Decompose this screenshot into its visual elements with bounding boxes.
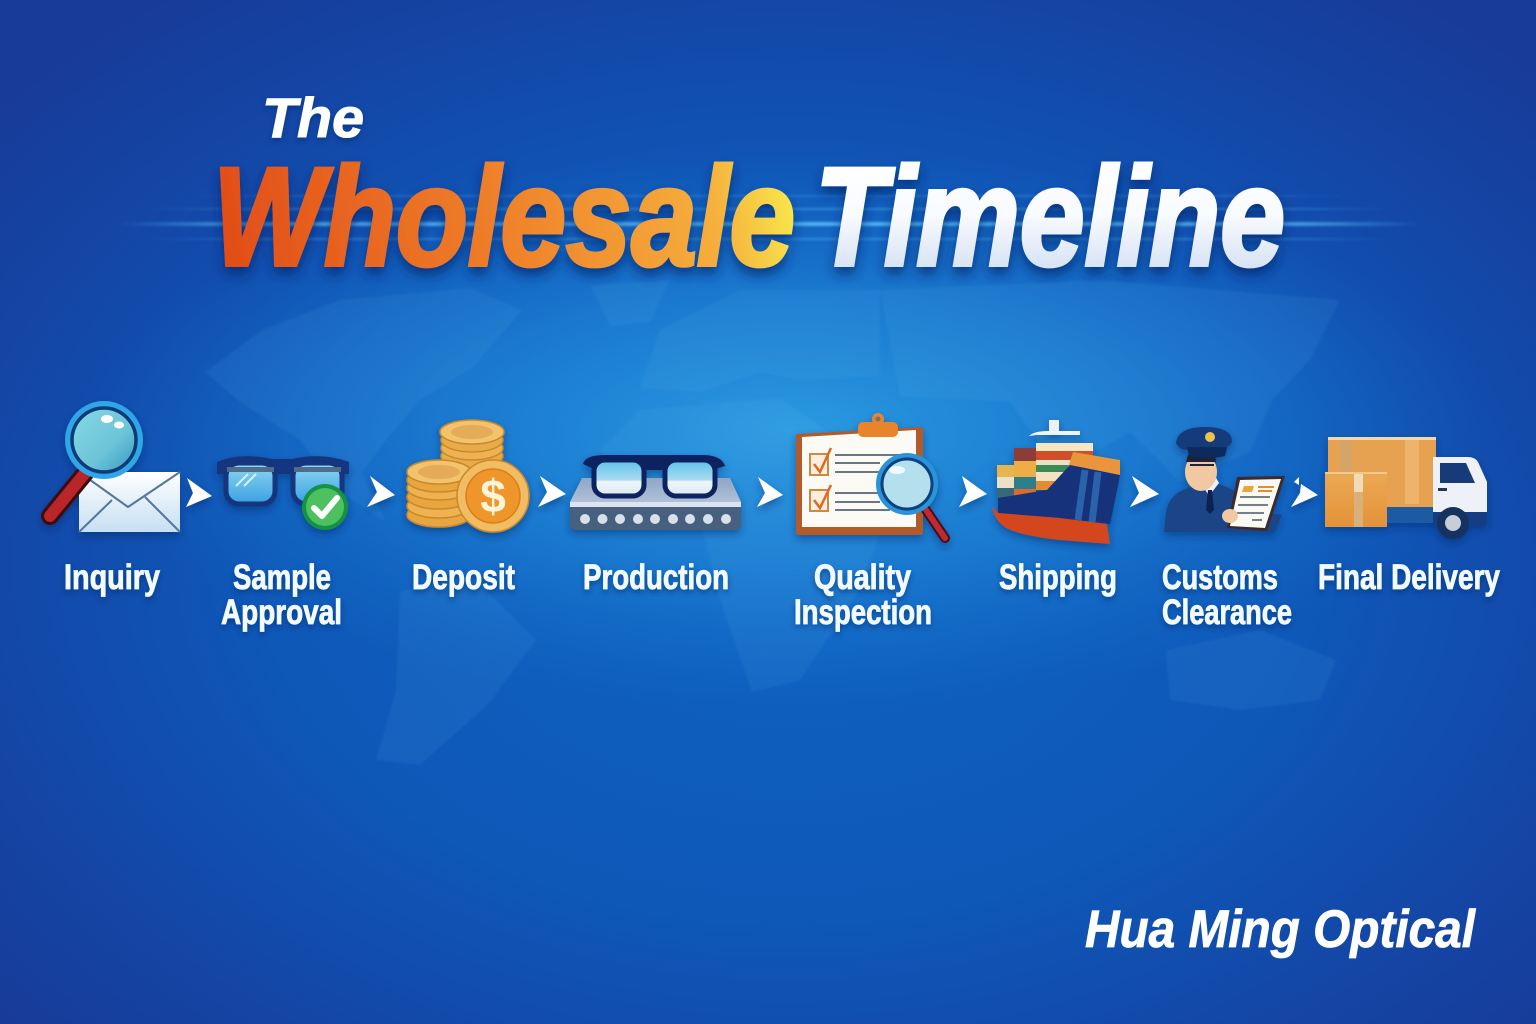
arrow 2 <box>367 476 395 507</box>
icon: inquiry magnifier and envelope <box>50 401 180 532</box>
icon: sample approval glasses with check <box>217 456 349 530</box>
arrow 6 <box>1130 476 1159 507</box>
icon: customs officer <box>1164 427 1285 532</box>
label: Quality Inspection: Inspection <box>794 593 932 632</box>
label: Production: Production <box>583 558 729 597</box>
icon: delivery truck with boxes <box>1325 437 1487 539</box>
label: Customs Clearance: Clearance <box>1162 593 1292 632</box>
label: Quality Inspection <box>794 558 932 632</box>
arrow 4 <box>757 477 783 507</box>
faint world map <box>205 280 1340 765</box>
arrow 7 <box>1291 477 1318 507</box>
arrow 5 <box>959 476 987 507</box>
title: The: The <box>262 86 364 149</box>
title: Wholesale: Wholesale <box>213 138 795 295</box>
label: Customs Clearance <box>1162 558 1292 632</box>
label: Sample Approval: Approval <box>221 593 342 632</box>
title glow streaks <box>120 195 1420 240</box>
icon: deposit coins <box>407 420 529 532</box>
icon: deposit coins: $ <box>480 470 506 522</box>
label: Deposit: Deposit <box>412 558 515 597</box>
title: Timeline: Timeline <box>815 138 1285 295</box>
label: Customs Clearance: Customs <box>1162 558 1278 597</box>
arrow 3 <box>538 476 566 507</box>
label: Sample Approval <box>221 558 342 632</box>
label: Inquiry: Inquiry <box>64 558 160 597</box>
label: Sample Approval: Sample <box>233 558 331 597</box>
label: Shipping: Shipping <box>999 558 1117 597</box>
icon: production machine with glasses <box>570 455 741 530</box>
label: Quality Inspection: Quality <box>814 558 911 597</box>
icon: container ship <box>992 420 1120 544</box>
icon: quality inspection clipboard <box>796 413 945 538</box>
arrow 1 <box>186 478 212 507</box>
brand: Hua Ming Optical: Hua Ming Optical <box>1085 900 1476 959</box>
